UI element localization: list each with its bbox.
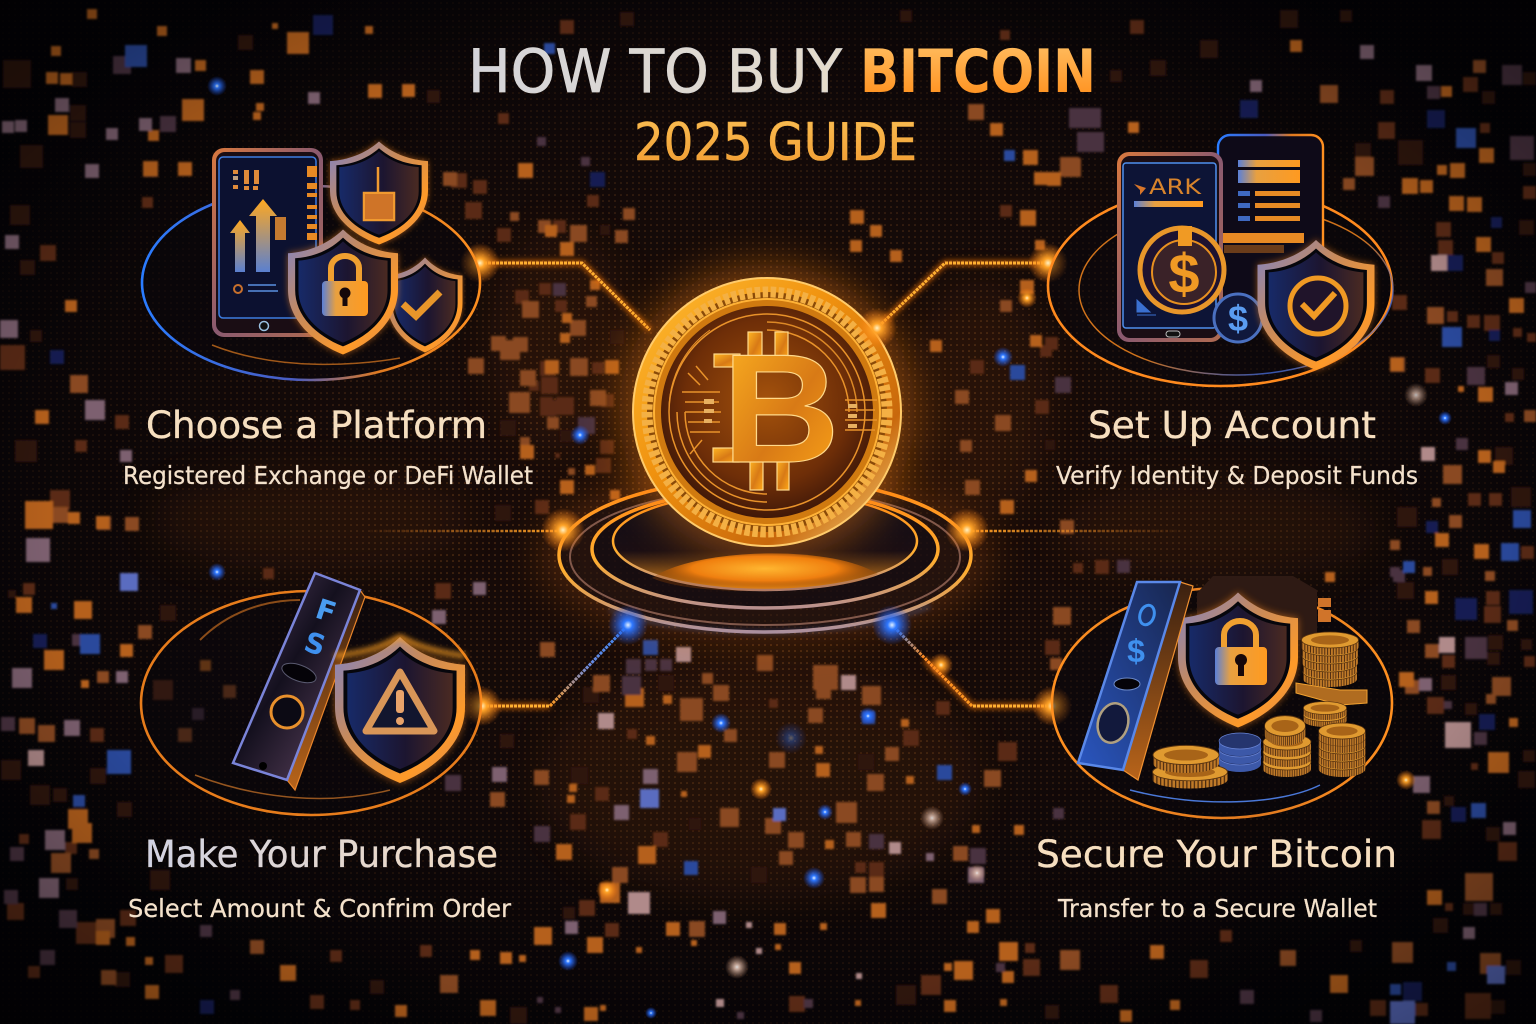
- panel: secure your bitcoin: [1052, 576, 1392, 818]
- title: BITCOIN: [860, 37, 1096, 107]
- icon: hardware wallet: $: [1127, 633, 1145, 669]
- icon: shield with brush: [330, 142, 428, 244]
- icon: small dollar coin: $: [1228, 298, 1248, 339]
- text: secure your bitcoin: Transfer to a Secure Wallet: [1057, 894, 1377, 923]
- title: HOW TO BUY: [468, 37, 842, 107]
- icon: hardware wallet: S: [300, 625, 330, 663]
- icon: ring: [141, 591, 481, 815]
- heading: make your purchase: Make Your Purchase: [145, 833, 498, 876]
- icon: phone: [212, 148, 323, 337]
- icon: shield with warning: [335, 637, 465, 783]
- panel: make your purchase: [141, 573, 481, 815]
- bitcoin coin: B: [722, 322, 840, 495]
- heading: choose a platform: Choose a Platform: [146, 404, 487, 447]
- icon: box: [1197, 576, 1331, 640]
- icon: hardware wallet: F: [312, 592, 340, 630]
- icon: document panel: [1218, 135, 1323, 305]
- subtitle: 2025 GUIDE: [634, 113, 917, 173]
- icon: ring: [1052, 588, 1392, 818]
- panel: set up account: [1048, 135, 1393, 386]
- icon: hardware wallet: [1078, 582, 1193, 780]
- heading: set up account: Set Up Account: [1088, 404, 1376, 447]
- icon: shield with check: [388, 258, 462, 352]
- bitcoin coin: [619, 264, 915, 560]
- icon: ring: [142, 186, 480, 380]
- icon: shield with padlock: [1178, 592, 1298, 728]
- icon: dollar coin: $: [1168, 242, 1200, 305]
- connector lines: [370, 263, 1190, 706]
- background warm haze: [150, 230, 1380, 900]
- text: make your purchase: Select Amount & Confrim Order: [128, 894, 512, 923]
- icon: ring: [1048, 186, 1393, 386]
- icon: coin stacks: [1152, 632, 1367, 788]
- icon: phone: ARK: [1149, 175, 1202, 199]
- icon: small dollar coin: [1214, 294, 1262, 342]
- icon: dollar coin: [1140, 226, 1224, 312]
- title: [468, 37, 1096, 107]
- icon: shield with padlock: [288, 230, 398, 354]
- text: set up account: Verify Identity & Deposit Funds: [1056, 461, 1418, 490]
- icon: phone: [1117, 152, 1223, 342]
- node dots: [460, 243, 1072, 726]
- central platform: [540, 465, 990, 645]
- icon: hardware wallet: [233, 573, 365, 790]
- text: choose a platform: Registered Exchange or DeFi Wallet: [123, 461, 533, 490]
- background glowing stars: [207, 76, 1452, 1019]
- heading: secure your bitcoin: Secure Your Bitcoin: [1036, 833, 1397, 876]
- panel: choose a platform: [142, 142, 480, 380]
- icon: shield with check: [1258, 240, 1374, 370]
